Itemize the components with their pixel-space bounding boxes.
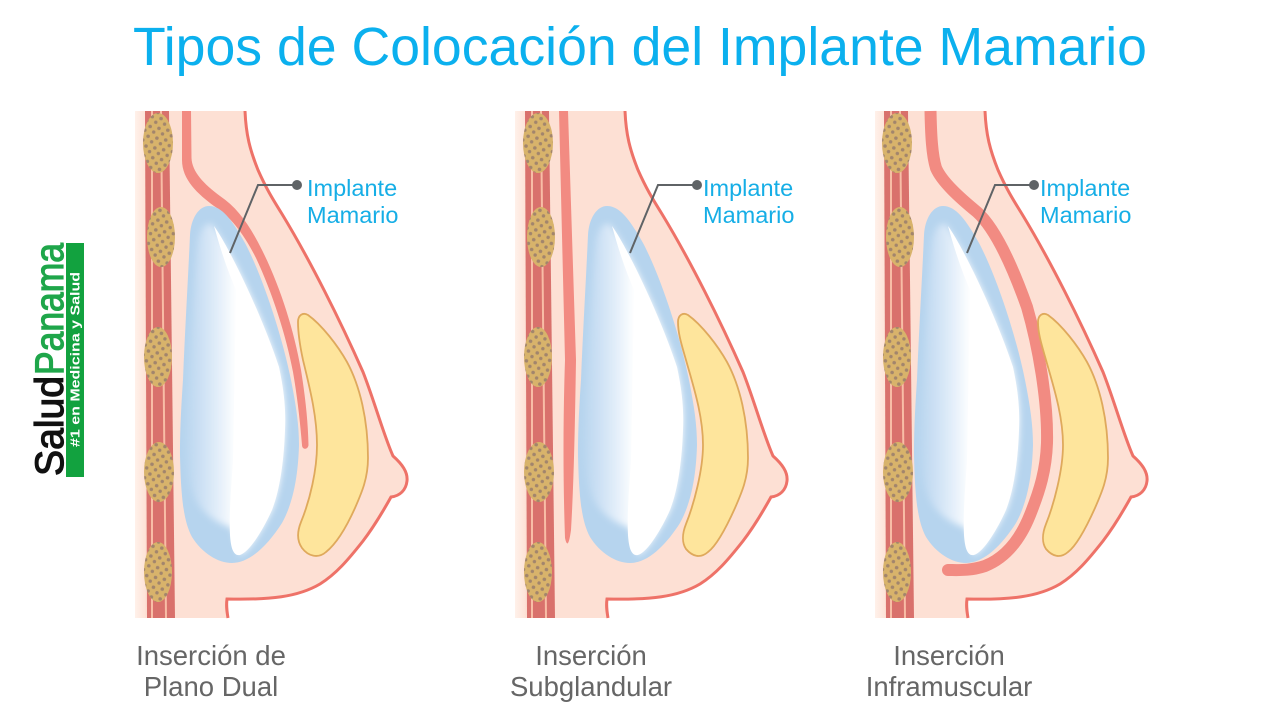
logo tagline bar: #1 en Medicina y Salud xyxy=(68,272,82,447)
implant label: Mamario xyxy=(307,202,398,228)
caption: Inserción xyxy=(535,640,647,671)
leader line xyxy=(967,180,1039,253)
implant label: Implante xyxy=(307,175,397,201)
pectoral muscle xyxy=(930,111,1047,576)
implant label: Implante xyxy=(703,175,793,201)
chest muscle and ribs xyxy=(523,111,555,618)
body silhouette xyxy=(875,111,1147,618)
implant label: Implante xyxy=(1040,175,1130,201)
leader line xyxy=(230,180,302,253)
mammary gland xyxy=(1038,314,1108,556)
pectoral muscle xyxy=(182,111,308,449)
logo tagline bar xyxy=(66,243,84,477)
title: Tipos de Colocación del Implante Mamario xyxy=(133,17,1147,77)
chest muscle and ribs xyxy=(143,111,175,618)
mammary gland xyxy=(298,314,368,556)
panel: plano dual xyxy=(135,111,407,702)
implant xyxy=(578,206,697,563)
implant xyxy=(914,206,1033,563)
caption: Inframuscular xyxy=(866,671,1032,702)
implant label: Mamario xyxy=(703,202,794,228)
caption: Plano Dual xyxy=(144,671,278,702)
logo wordmark: Panama xyxy=(28,242,72,375)
implant label: Mamario xyxy=(1040,202,1131,228)
panel: inframuscular xyxy=(866,111,1147,702)
body silhouette xyxy=(135,111,407,618)
mammary gland xyxy=(678,314,748,556)
logo: SaludPanama xyxy=(28,242,84,477)
implant xyxy=(180,206,299,563)
logo wordmark xyxy=(28,242,72,476)
caption: Subglandular xyxy=(510,671,672,702)
leader line xyxy=(630,180,702,253)
pectoral muscle xyxy=(559,111,576,543)
caption: Inserción xyxy=(893,640,1005,671)
body silhouette xyxy=(515,111,787,618)
panel: subglandular xyxy=(510,111,794,702)
caption: Inserción de xyxy=(136,640,286,671)
chest muscle and ribs xyxy=(882,111,914,618)
logo wordmark: Salud xyxy=(28,376,72,476)
